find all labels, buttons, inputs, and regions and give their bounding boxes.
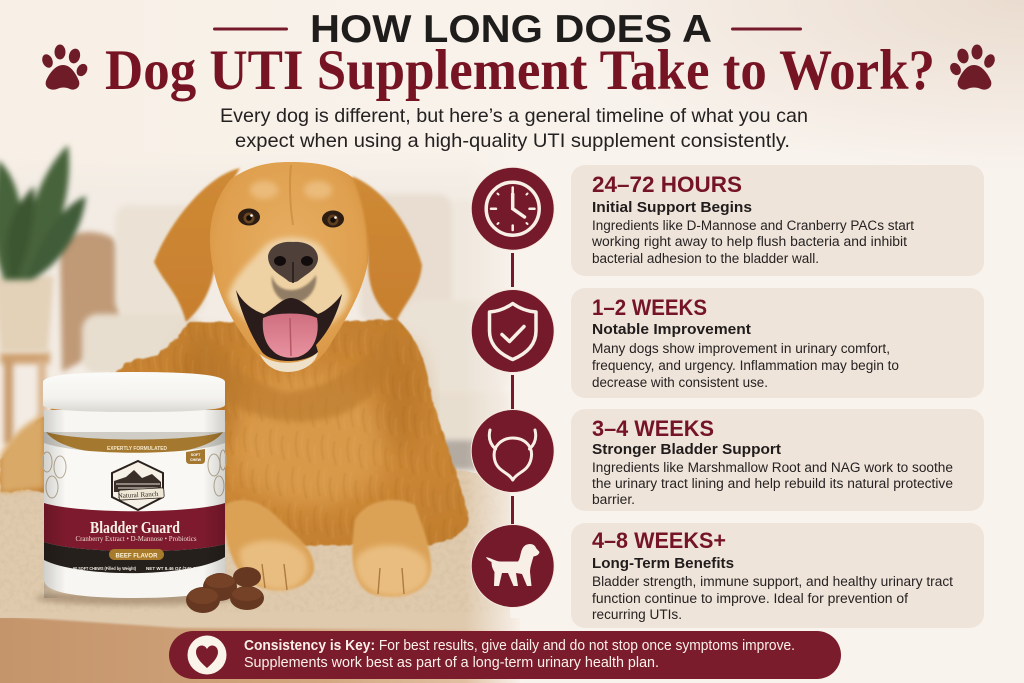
card 1 body xyxy=(591,218,914,266)
hind leg pale xyxy=(0,415,44,493)
label band text: EXPERTLY FORMULATED xyxy=(107,446,167,452)
step 1 icon: clock xyxy=(471,167,554,250)
soft chew badge: CHEW xyxy=(190,458,202,462)
card 3 subheading: Stronger Bladder Support xyxy=(592,441,781,458)
card 4 body: recurring UTIs. xyxy=(592,607,682,622)
card 2 body: decrease with consistent use. xyxy=(592,375,768,390)
tongue xyxy=(263,314,318,358)
flavor pill: BEEF FLAVOR xyxy=(116,554,158,560)
soft chew badge: SOFT xyxy=(191,453,201,457)
grey wedge xyxy=(44,432,225,458)
card 2 body: frequency, and urgency. Inflammation may begin to xyxy=(592,358,899,373)
card 3 xyxy=(571,409,984,511)
left rule xyxy=(213,28,288,30)
title line 1 xyxy=(213,8,802,51)
timeline connector xyxy=(511,253,514,525)
head xyxy=(210,162,369,372)
carpet xyxy=(0,470,510,632)
chews xyxy=(186,567,264,613)
card 1 body: working right away to help flush bacteria and inhibit xyxy=(591,234,907,249)
card 1 heading: 24–72 HOURS xyxy=(592,172,742,197)
card 3 body: Ingredients like Marshmallow Root and NAG work to soothe xyxy=(592,460,953,475)
jar shadow xyxy=(35,591,235,605)
card 4 subheading: Long-Term Benefits xyxy=(592,555,734,572)
card 2 body xyxy=(592,341,899,390)
jar neck shade xyxy=(44,410,225,598)
card 3 body: barrier. xyxy=(592,492,635,507)
ingredients: Cranberry Extract • D-Mannose • Probiotics xyxy=(76,534,197,543)
right eye xyxy=(322,210,344,228)
callout text: Supplements work best as part of a long-term urinary health plan. xyxy=(244,655,659,671)
card 1 subheading: Initial Support Begins xyxy=(592,199,752,216)
sofa cushions and base xyxy=(82,194,512,440)
subtitle xyxy=(220,105,808,152)
photo: golden retriever xyxy=(0,162,480,596)
step 4 icon: dog xyxy=(471,524,554,608)
shadow under sofa xyxy=(420,440,500,470)
card 4 body: Bladder strength, immune support, and healthy urinary tract xyxy=(592,574,953,589)
card 2 subheading: Notable Improvement xyxy=(592,321,751,338)
card 4 heading: 4–8 WEEKS+ xyxy=(592,528,726,553)
armchair xyxy=(60,232,120,372)
card 4 body: function continue to improve. Ideal for prevention of xyxy=(592,591,908,606)
right rule xyxy=(731,28,802,30)
card 2 xyxy=(571,288,984,398)
jar lid xyxy=(43,372,225,412)
jar count: 60 SOFT CHEWS (Filled by Weight) xyxy=(73,566,136,571)
icon: heart xyxy=(188,636,226,674)
card 1 xyxy=(571,165,984,276)
plant leaves xyxy=(0,145,86,280)
dog body xyxy=(0,320,469,545)
soft chew badge xyxy=(186,449,205,464)
open mouth xyxy=(236,290,342,361)
wood floor xyxy=(0,618,520,683)
logo xyxy=(112,461,164,510)
title line 2: Dog UTI Supplement Take to Work? xyxy=(105,39,935,102)
front leg left xyxy=(224,500,314,590)
overline text: HOW LONG DOES A xyxy=(310,8,712,51)
step 3 icon: bladder xyxy=(471,410,554,492)
plant pot xyxy=(0,276,54,352)
icon: right paw xyxy=(948,44,997,90)
left ear xyxy=(154,168,240,322)
wall xyxy=(0,170,500,450)
step 2 icon: shield xyxy=(471,290,554,372)
white label xyxy=(44,443,225,511)
card 3 body xyxy=(592,460,953,507)
muzzle xyxy=(228,238,350,332)
subtitle: Every dog is different, but here’s a general timeline of what you can xyxy=(220,105,808,127)
top right background tint xyxy=(500,0,1024,180)
fade to panel xyxy=(465,150,525,683)
card 2 body: Many dogs show improvement in urinary comfort, xyxy=(592,341,890,356)
nose xyxy=(268,242,318,283)
card 4 body xyxy=(592,574,953,622)
jar body xyxy=(44,410,225,598)
red band xyxy=(44,503,225,551)
icon: left paw xyxy=(40,44,90,90)
photo: blurred living room xyxy=(0,145,1024,683)
product name: Bladder Guard xyxy=(90,518,180,537)
jar weight: NET WT 8.46 OZ (240 G) xyxy=(146,566,198,572)
callout text: Consistency is Key: For best results, give daily and do not stop once symptoms improve. xyxy=(244,638,795,654)
card 3 heading: 3–4 WEEKS xyxy=(592,416,714,441)
callout text xyxy=(244,638,795,671)
left badges xyxy=(42,452,66,498)
side table xyxy=(0,352,50,444)
right badges xyxy=(208,450,226,496)
forehead crease xyxy=(290,165,293,225)
left eye xyxy=(238,208,260,226)
dark band xyxy=(44,542,225,573)
card 4 xyxy=(571,523,984,628)
card 2 heading: 1–2 WEEKS xyxy=(592,295,707,320)
chin xyxy=(260,352,318,372)
product jar xyxy=(35,372,235,605)
card 3 body: the urinary tract lining and help rebuild its natural protective xyxy=(592,476,953,491)
flavor pill xyxy=(109,549,164,560)
grey around nose xyxy=(272,275,316,303)
gold band xyxy=(46,432,223,455)
logo: Natural Ranch xyxy=(118,490,159,500)
front leg right xyxy=(352,500,431,596)
card 1 body: Ingredients like D-Mannose and Cranberry PACs start xyxy=(592,218,914,233)
card 1 body: bacterial adhesion to the bladder wall. xyxy=(592,251,819,266)
neck shadow xyxy=(190,320,396,422)
callout bar xyxy=(169,631,841,679)
subtitle: expect when using a high-quality UTI supplement consistently. xyxy=(235,130,790,152)
right ear xyxy=(352,176,422,322)
